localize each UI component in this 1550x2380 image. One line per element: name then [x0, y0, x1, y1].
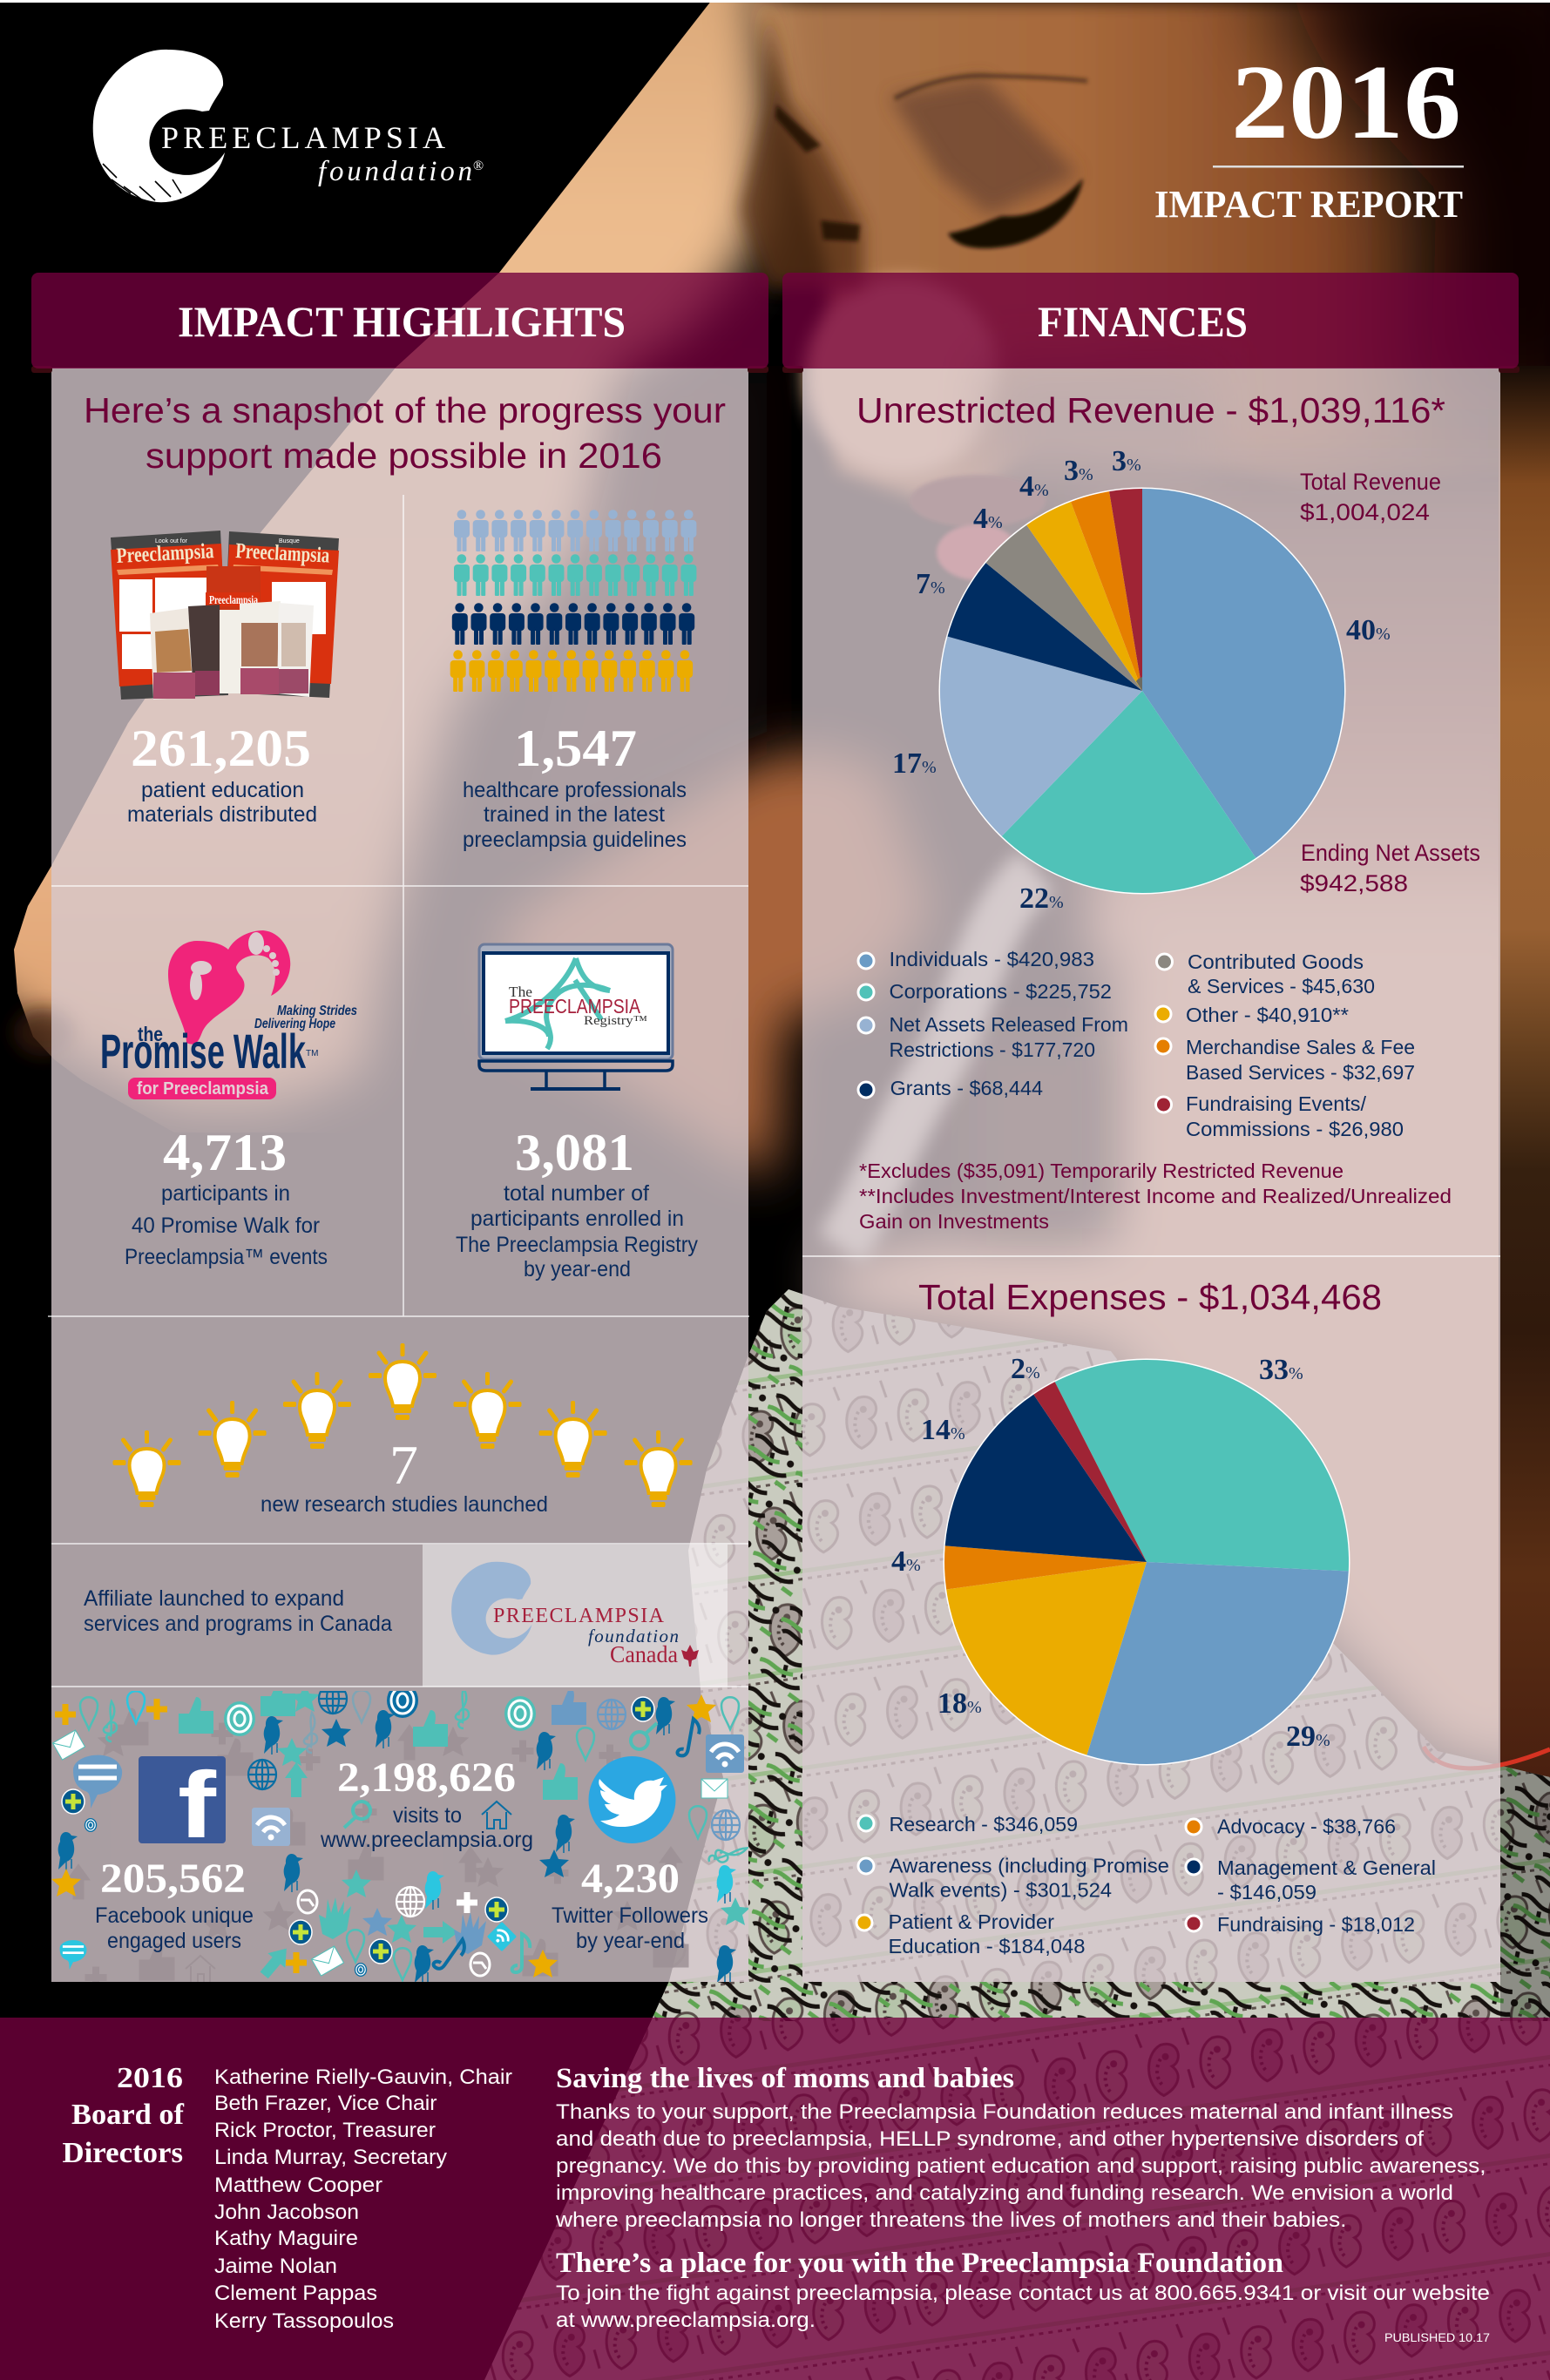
pie labels: revenue percentages: 17% [892, 747, 937, 780]
stat: 4,713 Promise Walk participants [125, 1124, 328, 1269]
stat: 1,547 healthcare professionals [463, 720, 687, 852]
legend: revenue sources: Restrictions - $177,720 [889, 1038, 1095, 1061]
header logo: Preeclampsia Foundation: ® [473, 159, 484, 173]
heading: board of directors: Board of [71, 2099, 185, 2131]
text block: call to action: There’s a place for you with the Preeclampsia Foundation [556, 2248, 1283, 2279]
heading: board of directors [63, 2062, 185, 2169]
stat: 4,230 Twitter followers: Twitter Followers [552, 1903, 708, 1928]
list: board members: Kathy Maguire [214, 2227, 358, 2250]
text block: mission: improving healthcare practices, and catalyzing and funding research. We envision a world [556, 2181, 1453, 2205]
legend: revenue sources: Commissions - $26,980 [1186, 1118, 1404, 1140]
list: board members: Linda Murray, Secretary [214, 2146, 447, 2169]
text block: call to action: at www.preeclampsia.org. [556, 2309, 816, 2332]
legend: revenue sources: Grants - $68,444 [890, 1077, 1043, 1099]
legend: revenue sources [858, 948, 1415, 1140]
pie labels: revenue percentages: 7% [916, 568, 945, 600]
icon: Facebook: f [178, 1752, 217, 1857]
icon: patient education brochures: Preeclampsia [235, 539, 330, 568]
title: 2016 Impact Report [1154, 44, 1464, 226]
stat: 4,230 Twitter followers: 4,230 [581, 1856, 680, 1902]
social icon cloud [51, 1680, 750, 1988]
logo: the Promise Walk: for Preeclampsia [137, 1079, 269, 1099]
text: Canada affiliate: services and programs in Canada [84, 1612, 392, 1636]
legend: revenue sources: Net Assets Released From [889, 1013, 1128, 1036]
logo: the Promise Walk [100, 930, 357, 1099]
legend: expense categories: Awareness (including Promise [889, 1854, 1169, 1876]
logo: Preeclampsia Foundation Canada: PREECLAMPSIA [493, 1605, 665, 1627]
list: board members: Jaime Nolan [214, 2255, 337, 2278]
stat: 261,205 patient education materials: patient education [141, 778, 304, 802]
heading: board of directors: 2016 [117, 2062, 183, 2094]
stat: 3,081 registry participants: by year-end [524, 1257, 631, 1281]
heading bar: impact highlights: IMPACT HIGHLIGHTS [178, 297, 626, 346]
pie labels: expense percentages: 29% [1286, 1721, 1330, 1753]
pie labels: expense percentages [891, 1353, 1330, 1753]
icon: patient education brochures [111, 531, 339, 700]
text block: call to action: To join the fight against preeclampsia, please contact us at 800.665.9341 or visit our website [556, 2282, 1490, 2305]
stat: 4,230 Twitter followers [552, 1856, 708, 1953]
icon: rows of people [450, 510, 696, 692]
text: publication date: PUBLISHED 10.17 [1384, 2331, 1490, 2344]
pie labels: revenue percentages [892, 445, 1391, 915]
stat: 7 new research studies: new research studies launched [261, 1492, 548, 1517]
callout: total revenue [1300, 469, 1441, 525]
heading: unrestricted revenue: Unrestricted Revenue - $1,039,116* [856, 390, 1445, 430]
stat: 2,198,626 website visits: visits to [393, 1803, 462, 1828]
text: Canada affiliate [84, 1586, 392, 1636]
logo: the Promise Walk: Making Strides [277, 1004, 357, 1018]
stat: 205,562 Facebook users: engaged users [107, 1929, 241, 1953]
logo: Preeclampsia Foundation Canada [423, 1545, 728, 1687]
legend: revenue sources: Other - $40,910** [1186, 1004, 1349, 1026]
intro heading: support made possible in 2016 [146, 436, 662, 476]
list: board members: Katherine Rielly-Gauvin, Chair [214, 2066, 512, 2089]
footnotes: revenue: **Includes Investment/Interest Income and Realized/Unrealized [859, 1185, 1452, 1207]
logo: Preeclampsia Foundation Canada: Canada [610, 1641, 678, 1667]
stat: 3,081 registry participants: The Preeclampsia Registry [456, 1233, 698, 1257]
list: board members: Kerry Tassopoulos [214, 2309, 394, 2333]
icon: registry monitor: Registry™ [584, 1014, 647, 1028]
stat: 205,562 Facebook users: 205,562 [100, 1856, 246, 1902]
panel: impact highlights [31, 273, 768, 1988]
text: Canada affiliate: Affiliate launched to expand [84, 1586, 344, 1611]
icon: Twitter [589, 1756, 676, 1843]
footnotes: revenue: Gain on Investments [859, 1210, 1049, 1233]
pie labels: revenue percentages: 40% [1346, 614, 1391, 646]
callout: total revenue: Total Revenue [1300, 469, 1441, 495]
list: board members: Beth Frazer, Vice Chair [214, 2092, 437, 2115]
stat: 4,713 Promise Walk participants: Preeclampsia™ events [125, 1245, 328, 1269]
icon: patient education brochures: Busque [279, 538, 300, 544]
list: board members [214, 2066, 512, 2333]
legend: expense categories: Research - $346,059 [889, 1813, 1078, 1836]
callout: total revenue: $1,004,024 [1300, 499, 1430, 525]
intro heading [84, 390, 726, 476]
header logo: Preeclampsia Foundation: PREECLAMPSIA [161, 120, 445, 155]
logo: the Promise Walk: Delivering Hope [254, 1017, 335, 1031]
text block: mission: Saving the lives of moms and babies [556, 2063, 1014, 2094]
stat: 4,230 Twitter followers: by year-end [576, 1929, 685, 1953]
pie labels: revenue percentages: 4% [1019, 470, 1049, 503]
header logo: Preeclampsia Foundation [93, 50, 484, 202]
logo: the Promise Walk: Promise Walk [100, 1024, 307, 1078]
header logo: Preeclampsia Foundation: foundation [318, 156, 472, 187]
icon: seven lightbulbs [113, 1343, 693, 1507]
legend: revenue sources: Based Services - $32,697 [1186, 1061, 1415, 1084]
stat: 1,547 healthcare professionals: 1,547 [514, 720, 637, 777]
stat: 3,081 registry participants: 3,081 [515, 1124, 634, 1181]
stat: 7 new research studies: 7 [389, 1434, 418, 1496]
footer band [0, 2018, 1550, 2380]
stat: 205,562 Facebook users [95, 1856, 254, 1953]
legend: expense categories: Management & General [1217, 1856, 1436, 1879]
intro heading: Here’s a snapshot of the progress your [84, 390, 726, 430]
logo: the Promise Walk: the [138, 1023, 163, 1045]
pie labels: expense percentages: 14% [921, 1414, 965, 1446]
legend: revenue sources: Individuals - $420,983 [889, 948, 1094, 970]
legend: expense categories: Patient & Provider [889, 1910, 1054, 1933]
text block: mission: Thanks to your support, the Preeclampsia Foundation reduces maternal and infant illness [556, 2100, 1453, 2124]
stat: 261,205 patient education materials [127, 720, 317, 827]
heading bar: impact highlights [31, 273, 768, 373]
pie labels: revenue percentages: 4% [973, 503, 1003, 535]
stat: 1,547 healthcare professionals: healthcare professionals [463, 778, 687, 802]
footnotes: revenue: *Excludes ($35,091) Temporarily Restricted Revenue [859, 1160, 1344, 1182]
pie labels: revenue percentages: 3% [1064, 455, 1093, 487]
stat: 1,547 healthcare professionals: preeclampsia guidelines [463, 828, 687, 852]
icon: patient education brochures: Preeclampsia [209, 594, 258, 607]
stat: 4,713 Promise Walk participants: 40 Promise Walk for [132, 1214, 320, 1238]
pie labels: expense percentages: 4% [891, 1545, 921, 1578]
legend: revenue sources: Merchandise Sales & Fee [1186, 1036, 1415, 1058]
text block: mission: pregnancy. We do this by providing patient education and support, raising public awareness, [556, 2154, 1486, 2178]
pie labels: expense percentages: 33% [1259, 1354, 1303, 1386]
legend: expense categories: Advocacy - $38,766 [1217, 1815, 1396, 1838]
text block: mission: where preeclampsia no longer threatens the lives of mothers and their babies. [555, 2208, 1347, 2232]
stat: 7 new research studies [261, 1434, 548, 1517]
pie labels: revenue percentages: 22% [1019, 882, 1064, 915]
stat: 205,562 Facebook users: Facebook unique [95, 1903, 254, 1928]
heading: total expenses: Total Expenses - $1,034,468 [918, 1277, 1382, 1317]
heading: board of directors: Directors [63, 2137, 183, 2169]
text block: mission: and death due to preeclampsia, HELLP syndrome, and other hypertensive disorders of [556, 2127, 1424, 2151]
stat: 261,205 patient education materials: materials distributed [127, 802, 317, 827]
pie chart: expenses [943, 1359, 1350, 1765]
stat: 2,198,626 website visits [320, 1755, 533, 1852]
stat: 261,205 patient education materials: 261,205 [131, 720, 311, 777]
pie labels: expense percentages: 18% [937, 1687, 982, 1720]
legend: revenue sources: & Services - $45,630 [1188, 975, 1375, 997]
logo: the Promise Walk: TM [306, 1049, 318, 1058]
text block: mission [555, 2063, 1486, 2232]
stat: 3,081 registry participants: participants enrolled in [470, 1207, 684, 1231]
heading bar: finances: FINANCES [1038, 297, 1248, 346]
text block: call to action [556, 2248, 1490, 2332]
stat: 3,081 registry participants: total number of [504, 1181, 649, 1206]
legend: revenue sources: Corporations - $225,752 [889, 980, 1112, 1003]
list: board members: Matthew Cooper [214, 2174, 382, 2197]
stat: 1,547 healthcare professionals: trained in the latest [484, 802, 665, 827]
stat: 4,713 Promise Walk participants: participants in [161, 1181, 290, 1206]
list: board members: Rick Proctor, Treasurer [214, 2119, 436, 2142]
panel: finances [782, 273, 1520, 1982]
icon: registry monitor: PREECLAMPSIA [509, 995, 641, 1018]
pie chart: revenue [939, 488, 1345, 894]
footnotes: revenue [859, 1160, 1452, 1233]
callout: ending net assets: Ending Net Assets [1301, 840, 1480, 866]
legend: expense categories [856, 1813, 1436, 1957]
icon: patient education brochures: Preeclampsia [116, 539, 215, 568]
title: 2016 Impact Report: 2016 [1231, 44, 1461, 161]
pie labels: expense percentages: 2% [1011, 1353, 1040, 1385]
stat: 4,713 Promise Walk participants: 4,713 [163, 1124, 287, 1181]
pie labels: revenue percentages: 3% [1112, 445, 1141, 477]
stat: 2,198,626 website visits: 2,198,626 [337, 1755, 516, 1801]
logo: Preeclampsia Foundation Canada: foundation [588, 1626, 679, 1646]
list: board members: John Jacobson [214, 2201, 359, 2224]
legend: expense categories: Education - $184,048 [889, 1935, 1086, 1957]
list: board members: Clement Pappas [214, 2282, 377, 2305]
stat: 3,081 registry participants [456, 1124, 698, 1281]
stat: 2,198,626 website visits: www.preeclampsia.org [320, 1828, 533, 1852]
legend: expense categories: Walk events) - $301,524 [889, 1878, 1112, 1901]
legend: expense categories: - $146,059 [1217, 1881, 1316, 1903]
callout: ending net assets: $942,588 [1300, 870, 1408, 896]
callout: ending net assets [1300, 840, 1480, 896]
icon: registry monitor [479, 944, 673, 1091]
icon: Facebook [139, 1752, 226, 1857]
icon: patient education brochures: Look out for [155, 538, 188, 544]
legend: expense categories: Fundraising - $18,012 [1217, 1913, 1415, 1936]
legend: revenue sources: Fundraising Events/ [1186, 1092, 1367, 1115]
icon: registry monitor: The [509, 984, 532, 1000]
legend: revenue sources: Contributed Goods [1188, 950, 1364, 973]
heading bar: finances [782, 273, 1520, 373]
title: 2016 Impact Report: IMPACT REPORT [1154, 183, 1463, 226]
